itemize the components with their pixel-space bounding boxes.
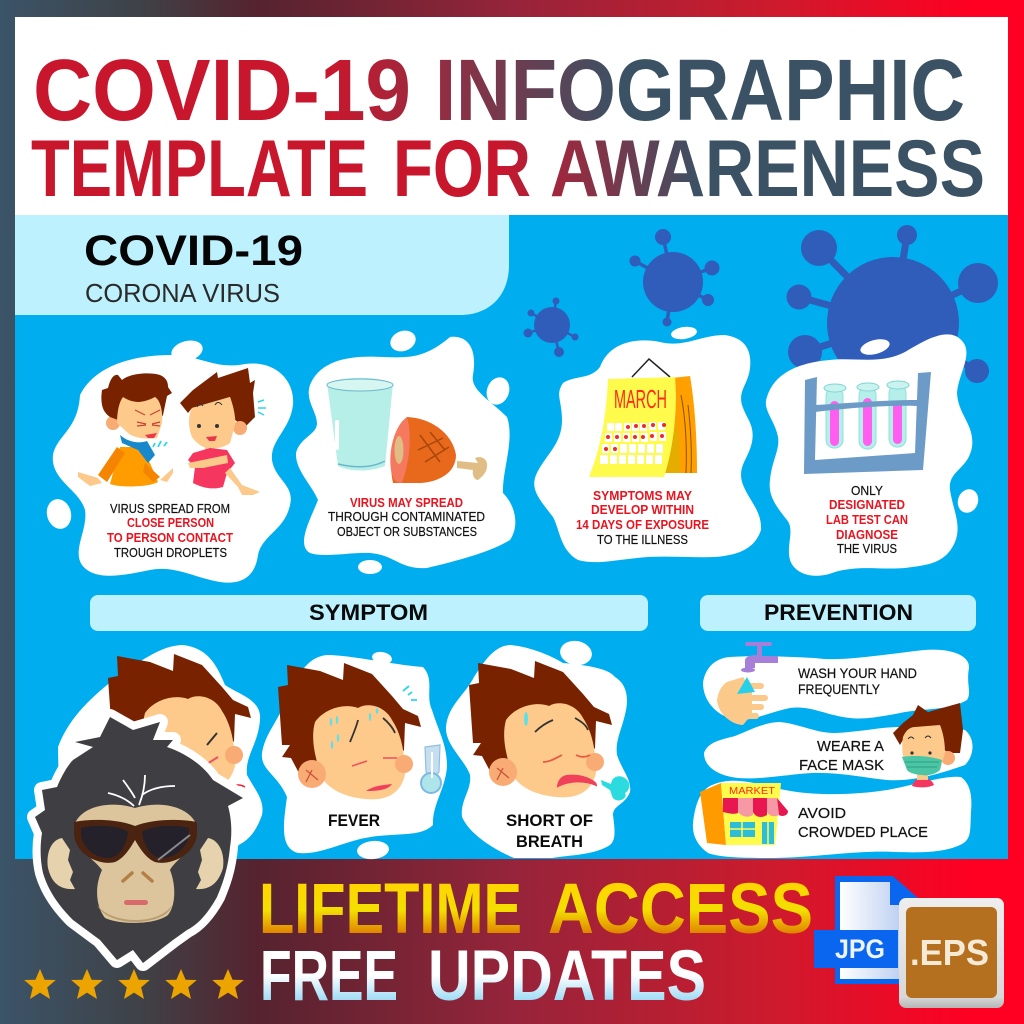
text: card 4 caption: THE VIRUS <box>837 542 897 556</box>
icon: test tube rack <box>804 372 931 474</box>
label: short of breath: SHORT OF <box>506 811 593 830</box>
icon: ham <box>390 417 487 483</box>
panel: prevention wash hands <box>703 644 969 725</box>
text: card 1 caption <box>107 502 233 560</box>
icon: sneezing boy <box>78 368 266 495</box>
text: avoid crowds: AVOID <box>798 805 846 822</box>
panel: symptom short of breath <box>446 645 630 858</box>
label: short of breath: BREATH <box>516 832 583 851</box>
label: short of breath <box>506 811 593 851</box>
text: lifetime access <box>259 870 813 949</box>
panel: symptom fever <box>262 655 447 853</box>
panel: heading tab <box>15 215 509 315</box>
panel: symptom cough <box>58 645 263 850</box>
text: card 3 caption <box>576 489 709 547</box>
panel: card 4 lab test <box>766 334 972 576</box>
bubble on virus <box>859 336 891 358</box>
text: card 3 caption: SYMPTOMS MAY <box>593 489 693 503</box>
panel: title banner <box>15 17 1008 216</box>
heading bar: prevention: PREVENTION <box>764 600 913 625</box>
icon: hand under tap <box>717 644 778 725</box>
text: avoid crowds <box>798 805 928 841</box>
icon: medium virus <box>630 229 720 326</box>
subheading: corona virus: CORONA VIRUS <box>85 278 280 308</box>
text: card 4 caption: DIAGNOSE <box>836 528 898 542</box>
text: card 1 caption: TROUGH DROPLETS <box>114 546 227 560</box>
text: card 4 caption: DESIGNATED <box>829 498 905 512</box>
icon: breathless boy head <box>469 661 612 797</box>
text: card 3 caption: DEVELOP WITHIN <box>591 503 694 517</box>
icon: EPS file <box>899 898 1004 1008</box>
calendar month label: MARCH <box>614 384 667 414</box>
panel: card 3 incubation <box>534 335 761 562</box>
sunglasses <box>74 820 197 863</box>
icon: small virus <box>524 298 578 357</box>
label: fever: FEVER <box>328 811 380 830</box>
icon: coughing boy head <box>108 654 251 790</box>
panel: blue infographic area <box>15 215 1008 859</box>
icon: market <box>700 783 788 845</box>
text: card 2 caption: VIRUS MAY SPREAD <box>350 496 463 510</box>
text: card 1 caption: TO PERSON CONTACT <box>107 531 233 545</box>
icon: JPG file: JPG <box>835 934 885 964</box>
icon: march calendar <box>589 359 697 477</box>
text: free updates: UPDATES <box>428 937 706 1016</box>
panel: prevention face mask <box>704 722 972 780</box>
panel: prevention avoid crowds <box>693 777 971 858</box>
panel: card 1 close contact <box>53 355 293 583</box>
icon: thermometer <box>421 745 441 793</box>
icon: JPG file <box>814 876 918 984</box>
monkey ears <box>48 838 223 889</box>
text: card 4 caption: LAB TEST CAN <box>826 513 908 527</box>
decorative bubbles <box>44 325 982 860</box>
text: wash hand: WASH YOUR HAND <box>798 665 917 681</box>
icon: boy with mask <box>893 703 963 787</box>
title line 2: FOR <box>393 124 531 214</box>
text: face mask: FACE MASK <box>799 757 884 774</box>
title line 1: COVID-19 <box>33 42 411 139</box>
panel: card 2 contaminated objects <box>296 337 515 568</box>
text: lifetime access: ACCESS <box>548 870 813 949</box>
icon: large virus <box>786 225 998 389</box>
market sign: MARKET <box>729 785 776 797</box>
monkey face <box>74 805 197 923</box>
text: lifetime access: LIFETIME <box>259 870 522 949</box>
icon: EPS file: .EPS <box>910 932 989 973</box>
stars rating <box>24 969 244 999</box>
text: card 4 caption <box>826 484 908 556</box>
text: avoid crowds: CROWDED PLACE <box>798 824 928 841</box>
icon: feverish boy head <box>278 663 421 799</box>
icon: monkey mascot logo <box>35 717 243 963</box>
text: card 2 caption: THROUGH CONTAMINATED <box>328 510 485 524</box>
brow hair <box>108 775 175 806</box>
icon: breath puff <box>601 776 629 801</box>
text: free updates: FREE <box>260 937 398 1016</box>
text: card 3 caption: 14 DAYS OF EXPOSURE <box>576 518 709 532</box>
text: card 2 caption: OBJECT OR SUBSTANCES <box>337 525 477 539</box>
nose <box>123 873 152 881</box>
title line 1 <box>33 42 965 139</box>
text: face mask: WEARE A <box>817 738 884 755</box>
text: card 1 caption: VIRUS SPREAD FROM <box>110 502 230 516</box>
text: card 2 caption <box>328 496 485 539</box>
heading bar: prevention <box>700 595 976 631</box>
text: wash hand <box>798 665 917 697</box>
title line 2: TEMPLATE <box>31 124 368 214</box>
text: wash hand: FREQUENTLY <box>798 681 881 697</box>
mouth <box>124 900 148 905</box>
text: card 1 caption: CLOSE PERSON <box>127 516 214 530</box>
heading bar: symptom: SYMPTOM <box>309 600 428 625</box>
text: face mask <box>799 738 884 774</box>
heading: COVID-19: COVID-19 <box>84 227 303 275</box>
text: card 3 caption: TO THE ILLNESS <box>597 533 688 547</box>
text: card 4 caption: ONLY <box>851 484 884 498</box>
text: free updates <box>260 937 706 1016</box>
heading bar: symptom <box>90 595 648 631</box>
title line 2 <box>31 124 985 214</box>
icon: glass of water <box>327 378 393 470</box>
